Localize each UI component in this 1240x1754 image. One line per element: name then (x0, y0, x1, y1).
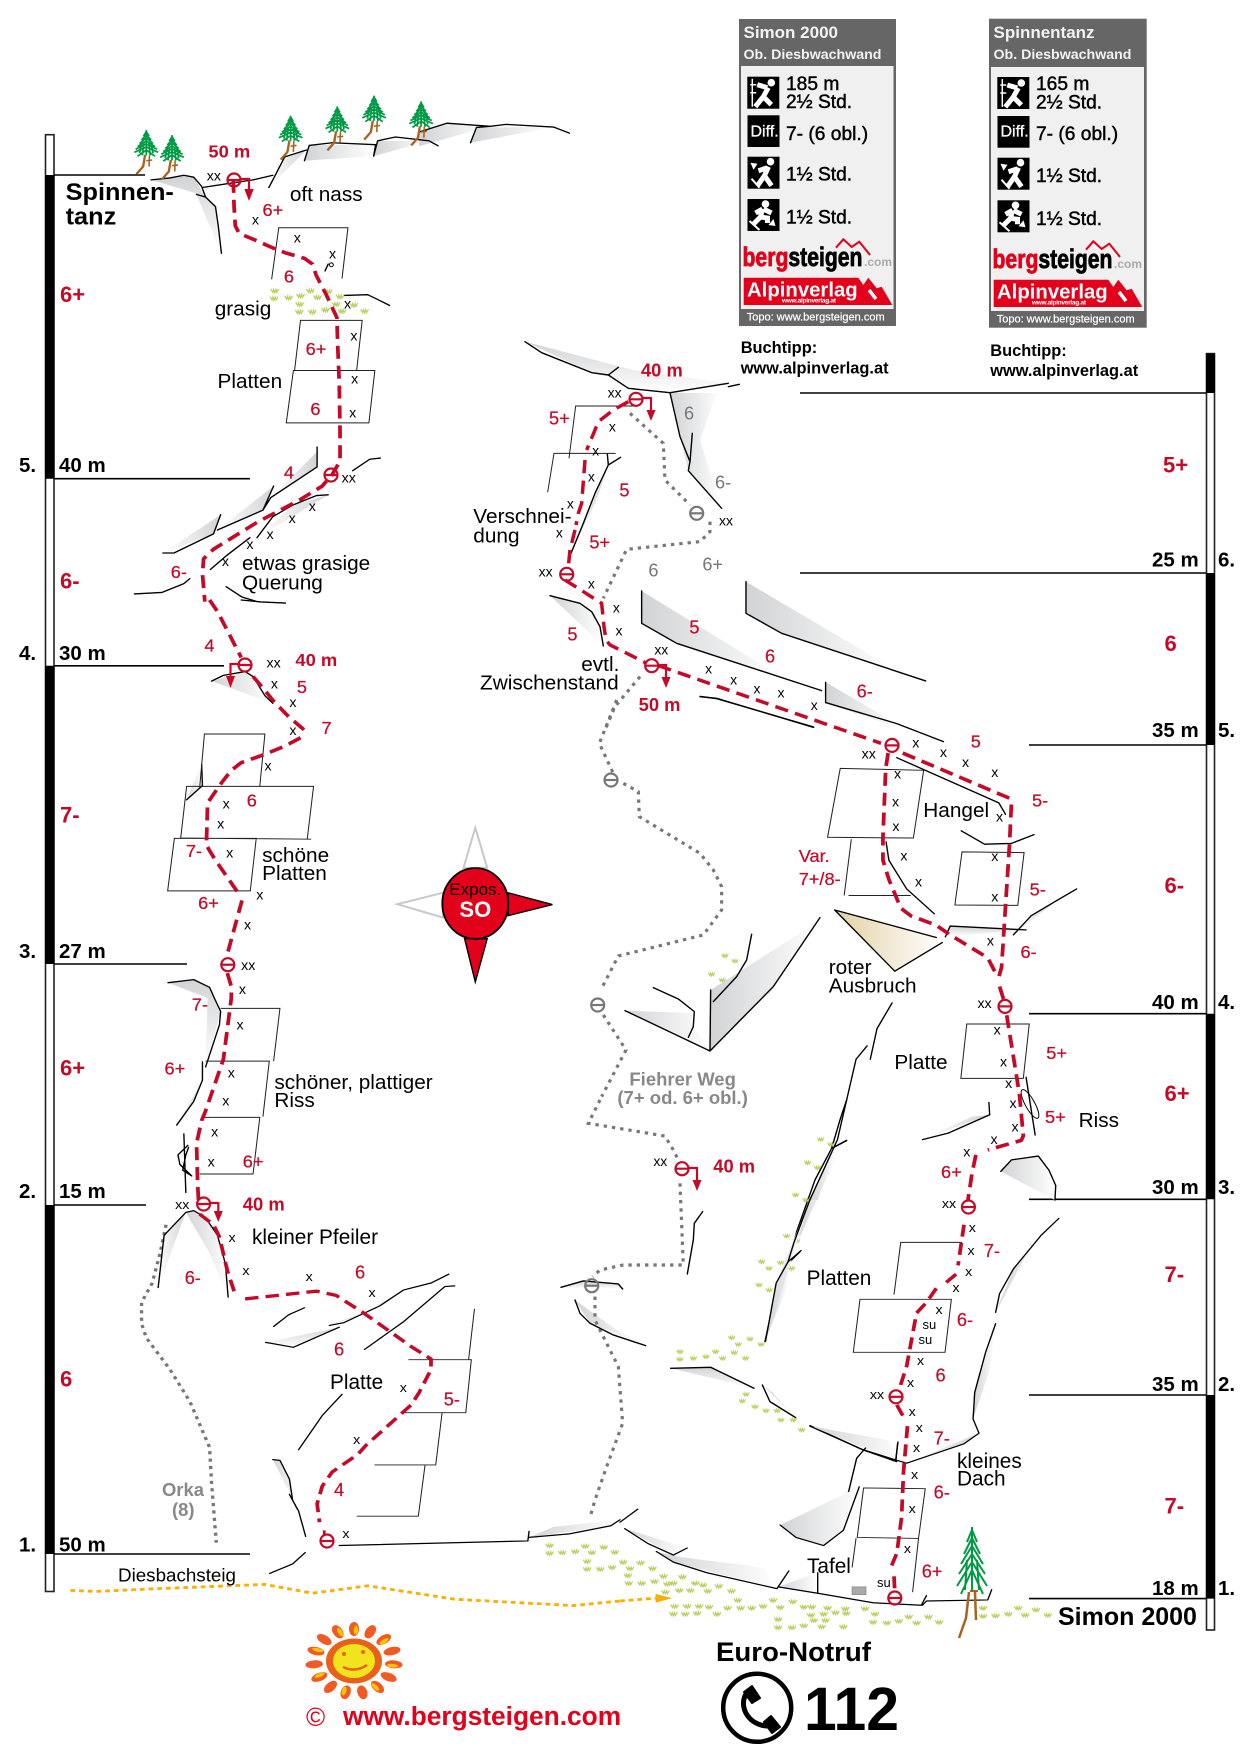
card: Spinnentanz route summary: 7- (6 obl.) (1036, 124, 1118, 145)
text block: lower right labels: 6- (957, 1310, 973, 1330)
panel: topo right Simon 2000 upper pitches: x (963, 1144, 970, 1159)
card: Spinnentanz route summary: Alpinverlag (997, 282, 1108, 304)
card: Simon 2000 route summary: 1½ Std. (786, 165, 852, 186)
panel: topo right Simon 2000 upper pitches: 5- (1030, 880, 1046, 899)
text block: lower left labels: kleiner Pfeiler (252, 1226, 378, 1249)
panel: topo upper left Spinnentanz summit: x (222, 553, 229, 569)
text block: lower left labels (118, 1194, 460, 1586)
text block: lower left labels: (8) (172, 1499, 194, 1520)
text block: lower right labels: 6+ (922, 1561, 942, 1581)
panel: topo middle left Spinnentanz: x (271, 676, 278, 691)
card: Simon 2000 route summary: Simon 2000 (744, 23, 838, 42)
panel: topo upper left Spinnentanz summit: 6+ (306, 339, 326, 359)
panel: topo upper left Spinnentanz summit (66, 96, 571, 602)
panel: topo upper left Spinnentanz summit: x (267, 526, 274, 542)
panel: topo right Simon 2000 upper pitches: xx (862, 746, 876, 761)
panel: topo upper centre Simon 2000: 5 (619, 481, 629, 501)
text: emergency number: 112 (804, 1675, 899, 1743)
panel: topo upper centre Simon 2000: 40 m (641, 360, 683, 381)
panel: topo lower centre gully and slabs: xx (653, 1153, 667, 1169)
panel: topo upper centre Simon 2000: x (588, 575, 595, 591)
panel: topo right Simon 2000 upper pitches: 6- (1021, 942, 1037, 962)
panel: topo upper centre Simon 2000: xx (608, 385, 622, 401)
text block: lower right labels: 6- (934, 1483, 950, 1503)
panel: topo right Simon 2000 upper pitches: x (996, 809, 1003, 825)
panel: left pitch scale Spinnentanz: 15 m (59, 1180, 106, 1203)
panel: right pitch scale Simon 2000: 30 m (1152, 1176, 1199, 1199)
panel: topo upper left Spinnentanz summit: x (349, 405, 356, 420)
panel: topo middle left Spinnentanz: x (244, 917, 251, 932)
panel: topo middle left Spinnentanz: x (211, 1124, 218, 1139)
panel: topo right Simon 2000 upper pitches: x (991, 848, 998, 864)
text block: lower right labels: kleines (957, 1450, 1022, 1473)
card: Simon 2000 route summary: 185 m (786, 74, 839, 95)
text block: book tip Spinnentanz (989, 342, 1139, 380)
panel: topo upper centre Simon 2000: 6- (715, 472, 731, 492)
stands: grey belay stations of neighbouring routes (585, 507, 703, 1292)
panel: right pitch scale Simon 2000: 4. (1218, 991, 1235, 1014)
panel: topo upper centre Simon 2000: 5+ (589, 532, 610, 552)
panel: topo upper left Spinnentanz summit: 6 (284, 267, 294, 286)
panel: right pitch scale Simon 2000: 6. (1218, 548, 1235, 571)
panel: topo right Simon 2000 upper pitches: x (1009, 1095, 1017, 1111)
panel: topo lower left Spinnentanz start: xx (175, 1198, 190, 1212)
card: Spinnentanz route summary: 1½ Std. (1036, 166, 1102, 187)
panel: topo upper centre Simon 2000: 50 m (639, 694, 680, 715)
panel: topo right Simon 2000 upper pitches: roter (829, 956, 872, 979)
panel: topo upper left Spinnentanz summit: x (351, 371, 358, 386)
panel: right pitch scale Simon 2000: 3. (1218, 1176, 1235, 1199)
panel: topo right Simon 2000 upper pitches (700, 682, 1119, 1200)
panel: topo lower left Spinnentanz start: x (306, 1270, 313, 1284)
text block: lower left labels: 5- (444, 1390, 460, 1410)
panel: right pitch scale Simon 2000: 40 m (1152, 991, 1199, 1014)
panel: topo right Simon 2000 lower pitches: x (911, 1468, 918, 1482)
panel: topo right Simon 2000 upper pitches: 5 (971, 732, 981, 751)
panel: right pitch scale Simon 2000: 2. (1218, 1373, 1235, 1396)
panel: topo upper left Spinnentanz summit: Querung (242, 572, 323, 594)
card: Spinnentanz route summary: www.alpinverlag.at (1031, 300, 1087, 306)
text block: lower left labels: 40 m (243, 1194, 285, 1215)
panel: topo middle left Spinnentanz: xx (267, 655, 281, 671)
panel: topo upper centre Simon 2000: x (613, 599, 620, 615)
panel: topo middle left Spinnentanz: x (256, 887, 263, 903)
panel: topo right Simon 2000 lower pitches: x (936, 1303, 943, 1317)
panel: topo upper left Spinnentanz summit: 4 (284, 463, 294, 482)
card: Spinnentanz route summary: 1½ Std. (1036, 209, 1102, 230)
panel: topo upper left Spinnentanz summit: tanz (66, 203, 116, 231)
card: Spinnentanz route summary: .com (1114, 257, 1142, 271)
text block: lower right labels: 6 (936, 1365, 946, 1385)
panel: topo right Simon 2000 upper pitches: 7+/8- (799, 869, 841, 889)
panel: topo right Simon 2000 lower pitches: x (916, 1421, 923, 1435)
panel: topo right Simon 2000 lower pitches: x (953, 1281, 960, 1295)
card: Spinnentanz route summary (989, 19, 1147, 328)
panel: topo middle left Spinnentanz: x (222, 1093, 229, 1108)
panel: topo middle left Spinnentanz: 4 (204, 636, 215, 656)
panel: left pitch scale Spinnentanz: 1. (19, 1534, 36, 1557)
card: Simon 2000 route summary: 1½ Std. (786, 208, 852, 229)
panel: topo upper centre Simon 2000: x (777, 685, 784, 701)
panel: topo right Simon 2000 lower pitches: xx (942, 1197, 956, 1211)
panel: topo middle left Spinnentanz: x (236, 1017, 244, 1032)
panel: topo right Simon 2000 lower pitches: x (969, 1221, 976, 1235)
panel: topo upper centre Simon 2000: 6 (648, 561, 658, 581)
panel: right pitch scale Simon 2000: 1. (1218, 1577, 1235, 1600)
panel: topo middle left Spinnentanz: xx (241, 957, 255, 973)
card: Simon 2000 route summary: Alpinverlag (747, 280, 858, 302)
card: Spinnentanz route summary: Diff. (1000, 124, 1029, 141)
panel: topo middle left Spinnentanz: schöne (262, 844, 329, 867)
panel: topo right Simon 2000 upper pitches: x (915, 874, 922, 890)
panel: left pitch scale Spinnentanz: 5. (19, 454, 36, 477)
text block: book tip Spinnentanz: Buchtipp: (990, 342, 1067, 360)
panel: left pitch scale Spinnentanz: 7- (60, 803, 80, 828)
panel: topo lower left Spinnentanz start: x (353, 1433, 360, 1447)
text: Euro-Notruf heading: Euro-Notruf (716, 1637, 872, 1667)
panel: topo upper left Spinnentanz summit: 6- (171, 562, 187, 582)
panel: topo middle left Spinnentanz: evtl. (581, 653, 619, 676)
panel: topo right Simon 2000 lower pitches: x (917, 1354, 924, 1368)
panel: topo right Simon 2000 lower pitches: x (965, 1265, 973, 1279)
card: Simon 2000 route summary: 7- (6 obl.) (786, 124, 868, 145)
panel: topo lower centre gully and slabs: 40 m (713, 1156, 755, 1177)
text block: lower right labels: Platten (807, 1267, 871, 1290)
panel: right pitch scale Simon 2000: 5. (1218, 719, 1235, 742)
panel: left pitch scale Spinnentanz: 2. (19, 1180, 36, 1203)
panel: topo right Simon 2000 upper pitches: 5+ (1045, 1107, 1066, 1127)
panel: topo upper left Spinnentanz summit: xx (207, 168, 221, 184)
panel: topo right Simon 2000 upper pitches: x (892, 818, 900, 834)
text block: lower right labels: su (877, 1575, 891, 1590)
panel: topo lower left Spinnentanz start (70, 1198, 620, 1606)
card: Spinnentanz route summary: bergsteigen (992, 244, 1112, 274)
panel: topo upper centre Simon 2000: x (592, 443, 599, 459)
panel: topo upper left Spinnentanz summit: 6+ (263, 200, 283, 220)
panel: topo right Simon 2000 upper pitches: Riss (1079, 1109, 1119, 1132)
panel: topo upper centre Simon 2000: x (730, 672, 737, 688)
panel: topo middle left Spinnentanz (164, 600, 619, 1200)
card: Simon 2000 route summary: www.alpinverlag.at (781, 298, 837, 304)
card: Spinnentanz route summary: 165 m (1036, 74, 1089, 95)
text block: lower left labels: Platte (330, 1371, 383, 1394)
panel: topo middle left Spinnentanz: Zwischenstand (480, 672, 619, 694)
panel: left pitch scale Spinnentanz: 3. (19, 940, 36, 963)
panel: topo middle left Spinnentanz: x (289, 722, 297, 738)
panel: topo right Simon 2000 upper pitches: x (991, 764, 998, 780)
panel: topo upper left Spinnentanz summit: x (329, 246, 336, 262)
panel: topo upper centre Simon 2000: 6 (684, 403, 694, 423)
card: Spinnentanz route summary: Topo: www.bergsteigen.com (997, 314, 1135, 326)
text block: lower left labels: 6 (334, 1340, 344, 1360)
panel: topo right Simon 2000 upper pitches: Hangel (923, 799, 989, 822)
text: copyright and website: © (306, 1702, 325, 1732)
panel: topo centre Fiehrer Weg (599, 700, 820, 1108)
panel: topo right Simon 2000 upper pitches: x (994, 1022, 1001, 1038)
panel: topo right Simon 2000 upper pitches: x (990, 1131, 998, 1147)
panel: left pitch scale Spinnentanz: 4. (19, 642, 36, 665)
card: Spinnentanz route summary: 2½ Std. (1036, 93, 1102, 114)
panel: topo upper left Spinnentanz summit: grasig (215, 298, 271, 321)
panel: topo lower left Spinnentanz start: x (342, 1527, 350, 1541)
panel: topo right Simon 2000 upper pitches: Platte (894, 1051, 948, 1074)
panel: left pitch scale Spinnentanz: 30 m (59, 642, 106, 665)
text block: lower right labels (807, 1241, 1022, 1590)
panel: topo centre Fiehrer Weg: (7+ od. 6+ obl.) (617, 1087, 748, 1108)
panel: right pitch scale Simon 2000: 7- (1164, 1262, 1184, 1287)
panel: topo right Simon 2000 upper pitches: x (962, 754, 969, 770)
panel: topo middle left Spinnentanz: x (226, 845, 233, 861)
panel: topo right Simon 2000 upper pitches: x (912, 735, 919, 751)
panel: left pitch scale Spinnentanz: 6 (60, 1367, 72, 1392)
panel: topo right Simon 2000 lower pitches: xx (870, 1388, 884, 1402)
panel: topo middle left Spinnentanz: schöner, plattiger (274, 1071, 433, 1094)
panel: right pitch scale Simon 2000: 35 m (1152, 1373, 1199, 1396)
panel: topo upper centre Simon 2000 (525, 342, 926, 743)
panel: topo upper centre Simon 2000: x (811, 697, 818, 713)
panel: topo upper centre Simon 2000: xx (539, 564, 553, 580)
panel: topo right Simon 2000 upper pitches: 5- (1032, 791, 1048, 811)
panel: topo upper left Spinnentanz summit: Spinnen- (66, 179, 174, 206)
panel: topo middle left Spinnentanz: 7- (192, 995, 208, 1015)
text block: lower right labels: Dach (957, 1468, 1006, 1490)
icon: compass exposition SO: SO (459, 897, 491, 922)
text block: book tip Simon 2000: www.alpinverlag.at (740, 359, 889, 377)
text block: lower left labels: 4 (334, 1480, 344, 1500)
card: Spinnentanz route summary: Spinnentanz (994, 23, 1095, 42)
panel: topo right Simon 2000 upper pitches: x (900, 848, 907, 864)
panel: topo upper centre Simon 2000: 6+ (702, 555, 723, 575)
card: Simon 2000 route summary: bergsteigen (742, 242, 862, 272)
panel: topo right Simon 2000 lower pitches: x (968, 1244, 975, 1258)
panel: topo upper left Spinnentanz summit: Platten (217, 370, 282, 393)
card: Spinnentanz route summary: Ob. Diesbwachwand (994, 47, 1131, 63)
panel: topo upper left Spinnentanz summit: x (246, 536, 253, 552)
panel: topo middle left Spinnentanz: x (228, 1065, 235, 1081)
panel: topo middle left Spinnentanz: x (239, 981, 246, 997)
icon: telephone in circle (723, 1674, 791, 1742)
stands: belay stations and rappel arrows (197, 174, 1012, 1604)
panel: left pitch scale Spinnentanz: 6+ (60, 1056, 85, 1081)
panel: topo upper left Spinnentanz summit: x (294, 230, 301, 246)
panel: topo upper centre Simon 2000: xx (719, 513, 733, 529)
icon: large tree at the foot of Simon 2000 (957, 1527, 987, 1638)
panel: topo right Simon 2000 upper pitches: Var. (799, 846, 830, 866)
panel: topo upper centre Simon 2000: x (705, 660, 712, 676)
panel: topo upper left Spinnentanz summit: 6 (310, 399, 321, 419)
text block: lower right labels: su (918, 1332, 932, 1347)
panel: topo middle left Spinnentanz: Riss (274, 1089, 315, 1112)
panel: topo upper centre Simon 2000: x (567, 495, 574, 511)
panel: topo upper centre Simon 2000: x (588, 469, 595, 485)
panel: topo right Simon 2000 lower pitches: x (913, 1441, 920, 1455)
panel: topo right Simon 2000 upper pitches: x (991, 889, 998, 905)
panel: right pitch scale Simon 2000: 18 m (1152, 1577, 1199, 1600)
panel: topo right Simon 2000 upper pitches: 6+ (941, 1162, 962, 1182)
panel: topo lower centre gully and slabs (561, 1100, 898, 1514)
panel: topo upper centre Simon 2000: 5 (567, 625, 577, 645)
text block: lower right labels: 7- (934, 1428, 950, 1448)
panel: topo upper left Spinnentanz summit: xx (342, 470, 356, 486)
panel: right pitch scale Simon 2000: 6- (1164, 873, 1184, 898)
panel: topo right Simon 2000 upper pitches: x (987, 933, 994, 949)
panel: topo middle left Spinnentanz: 5 (297, 677, 307, 697)
panel: topo upper centre Simon 2000: 5 (689, 617, 699, 637)
panel: topo middle left Spinnentanz: x (208, 1154, 215, 1169)
panel: topo lower left Spinnentanz start: x (242, 1264, 250, 1278)
panel: topo right Simon 2000 upper pitches: x (940, 744, 947, 760)
panel: right pitch scale Simon 2000: 7- (1164, 1493, 1184, 1518)
panel: topo upper centre Simon 2000: 6- (857, 682, 873, 702)
text block: lower right labels: su (922, 1317, 936, 1332)
panel: topo right Simon 2000 upper pitches: Ausbruch (829, 975, 917, 998)
card: Simon 2000 route summary: Ob. Diesbwachwand (744, 47, 881, 63)
text block: lower left labels: Diesbachsteig (118, 1565, 236, 1586)
panel: right pitch scale Simon 2000: 6 (1164, 631, 1177, 656)
panel: topo lower left Spinnentanz start: x (229, 1231, 236, 1245)
panel: topo upper left Spinnentanz summit: x (309, 498, 316, 514)
panel: topo upper left Spinnentanz summit: x (344, 296, 351, 311)
panel: topo middle left Spinnentanz: 6 (247, 791, 257, 811)
text block: lower right labels: 7- (984, 1241, 1000, 1261)
panel: topo centre Fiehrer Weg: Fiehrer Weg (629, 1069, 736, 1090)
panel: topo upper left Spinnentanz summit: etwas grasige (242, 553, 370, 575)
panel: topo upper left Spinnentanz summit: 50 m (208, 142, 250, 162)
panel: topo middle left Spinnentanz: 6+ (164, 1059, 185, 1078)
text block: book tip Simon 2000 (740, 339, 889, 377)
text block: lower left labels: Orka (162, 1479, 205, 1500)
panel: topo right Simon 2000 upper pitches: x (1000, 1054, 1007, 1069)
text block: lower left labels: 6 (355, 1262, 365, 1282)
panel: topo middle left Spinnentanz: x (217, 816, 224, 831)
panel: topo upper centre Simon 2000: 6 (765, 646, 775, 666)
panel: right pitch scale Simon 2000: Simon 2000 (1058, 1603, 1197, 1631)
panel: topo middle left Spinnentanz: 40 m (295, 650, 337, 670)
panel: right pitch scale Simon 2000: 6+ (1164, 1081, 1190, 1106)
panel: topo upper left Spinnentanz summit: x (252, 212, 259, 228)
panel: topo right Simon 2000 lower pitches: x (909, 1405, 916, 1419)
panel: topo upper centre Simon 2000: x (609, 419, 616, 435)
panel: topo right Simon 2000 upper pitches: xx (977, 995, 992, 1011)
card: Simon 2000 route summary (739, 19, 896, 326)
card: Simon 2000 route summary: .com (864, 255, 892, 269)
icon: compass exposition SO (397, 828, 552, 982)
panel: topo middle left Spinnentanz: Platten (262, 862, 327, 885)
panel: topo upper left Spinnentanz summit: oft nass (290, 183, 363, 206)
panel: topo middle left Spinnentanz: x (289, 694, 297, 710)
panel: left pitch scale Spinnentanz: 6- (60, 569, 80, 594)
panel: topo upper left Spinnentanz summit: Verschnei- (473, 505, 571, 528)
panel: topo upper left Spinnentanz summit: dung (473, 525, 520, 547)
panel: topo right Simon 2000 upper pitches: 5+ (1046, 1044, 1067, 1063)
panel: topo upper left Spinnentanz summit: x (350, 328, 357, 344)
panel: topo middle left Spinnentanz: 6+ (243, 1152, 263, 1171)
card: Simon 2000 route summary: Diff. (750, 124, 779, 141)
panel: topo middle left Spinnentanz: 6+ (198, 893, 219, 913)
panel: topo upper left Spinnentanz summit: x (289, 510, 296, 526)
panel: left pitch scale Spinnentanz: 27 m (59, 940, 106, 963)
panel: right pitch scale Simon 2000: 5+ (1163, 453, 1188, 478)
text block: book tip Spinnentanz: www.alpinverlag.at (989, 362, 1139, 380)
panel: left pitch scale Spinnentanz (19, 135, 250, 1592)
panel: topo middle left Spinnentanz: x (223, 796, 230, 812)
text: copyright and website: www.bergsteigen.com (342, 1701, 621, 1731)
panel: topo right Simon 2000 upper pitches: x (1005, 1075, 1012, 1091)
panel: left pitch scale Spinnentanz: 6+ (60, 282, 85, 307)
text block: lower right labels: Tafel (807, 1555, 851, 1578)
panel: topo middle left Spinnentanz: 7- (186, 841, 202, 861)
panel: topo upper centre Simon 2000: 5+ (549, 408, 570, 428)
panel: right pitch scale Simon 2000 (800, 354, 1235, 1631)
panel: topo right Simon 2000 upper pitches: x (1011, 1119, 1019, 1135)
card: Simon 2000 route summary: 2½ Std. (786, 92, 852, 113)
panel: right pitch scale Simon 2000: 35 m (1152, 719, 1199, 742)
panel: topo right Simon 2000 upper pitches: x (892, 794, 899, 810)
panel: topo upper centre Simon 2000: xx (654, 641, 668, 657)
panel: topo right Simon 2000 upper pitches: x (894, 766, 901, 782)
panel: topo right Simon 2000 lower pitches: x (907, 1376, 914, 1390)
panel: left pitch scale Spinnentanz: 50 m (59, 1534, 106, 1557)
panel: topo right Simon 2000 lower pitches: x (904, 1542, 911, 1556)
text block: lower left labels: 6- (185, 1268, 201, 1288)
panel: left pitch scale Spinnentanz: 40 m (59, 454, 106, 477)
panel: topo upper centre Simon 2000: x (556, 524, 563, 540)
panel: topo middle left Spinnentanz: x (265, 758, 272, 774)
panel: topo lower left Spinnentanz start: x (400, 1381, 407, 1395)
panel: topo upper centre Simon 2000: x (753, 680, 760, 696)
panel: topo middle left Spinnentanz: 7 (321, 718, 332, 738)
card: Simon 2000 route summary: Topo: www.bergsteigen.com (747, 312, 885, 324)
panel: topo lower left Spinnentanz start: x (369, 1286, 376, 1300)
panel: topo right Simon 2000 lower pitches: x (909, 1502, 916, 1516)
icon: compass exposition SO: Expos. (449, 880, 501, 899)
panel: topo right Simon 2000 lower pitches (619, 1197, 1059, 1629)
icon: smiling sun (305, 1622, 403, 1700)
text block: book tip Simon 2000: Buchtipp: (741, 339, 817, 357)
panel: topo upper centre Simon 2000: x (615, 622, 622, 638)
panel: right pitch scale Simon 2000: 25 m (1152, 548, 1199, 571)
